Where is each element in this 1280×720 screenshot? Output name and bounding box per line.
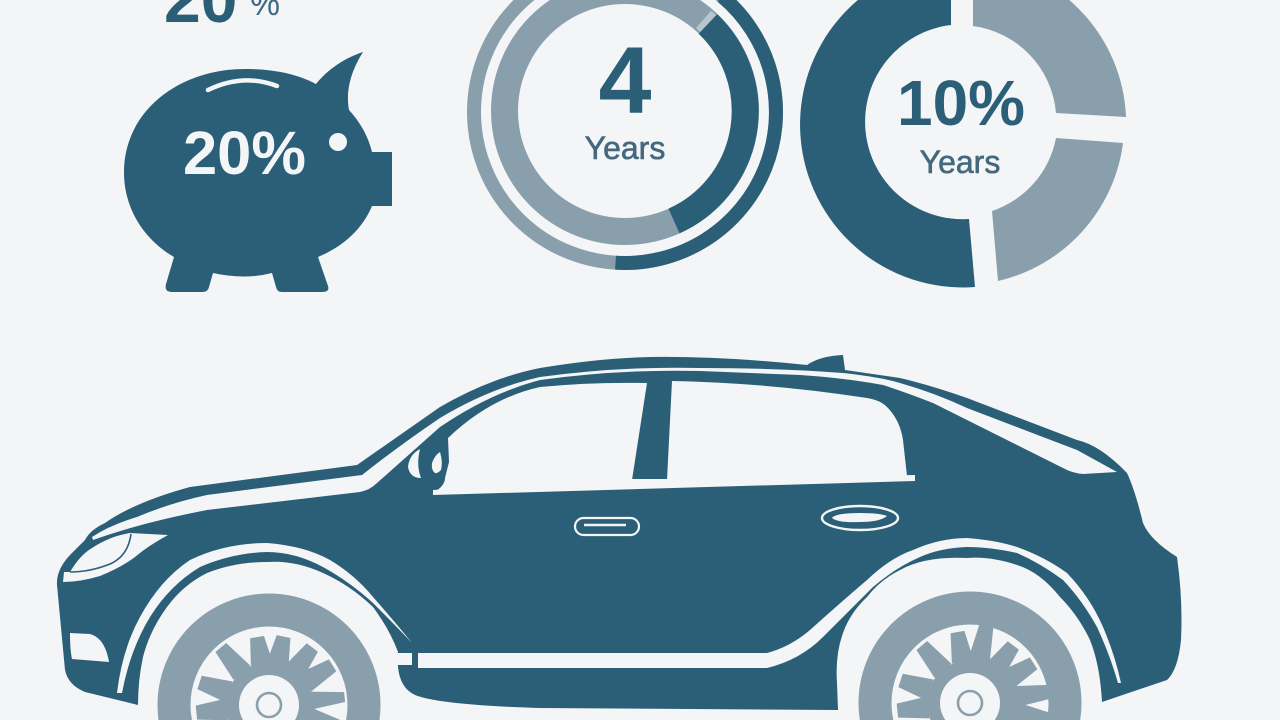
- front tyre: [174, 610, 364, 720]
- rear hub ring: [958, 691, 982, 715]
- front wheel: [174, 610, 364, 720]
- ring number: 4: [599, 28, 652, 134]
- roof and rear highlight: [700, 368, 1117, 474]
- outer ring track: [474, 0, 776, 263]
- donut grey segment lower: [992, 138, 1123, 281]
- belt line: [433, 475, 915, 495]
- mirror highlights: [408, 449, 442, 478]
- cropped heading: 20%: [164, 0, 280, 36]
- outer ring value: [616, 0, 776, 263]
- rear hub: [940, 673, 1000, 720]
- rear wheel: [875, 608, 1065, 720]
- inner ring highlight tick: [696, 11, 716, 32]
- front spokes: [195, 634, 346, 720]
- rear door handle: [822, 506, 898, 530]
- inner ring value: [674, 24, 745, 221]
- rear spokes: [896, 622, 1051, 720]
- front door handle: [575, 518, 639, 535]
- ring chart: 4 years: [474, 0, 776, 263]
- front arch highlight: [117, 543, 412, 693]
- sill end piece: [398, 653, 412, 665]
- front hub: [239, 675, 299, 720]
- headlight: [63, 533, 168, 582]
- sill and rear arch highlight: [418, 538, 1121, 683]
- ring caption: Years: [585, 130, 665, 166]
- rear tyre: [875, 608, 1065, 720]
- donut caption: Years: [920, 144, 1000, 180]
- donut dark segment: [800, 0, 975, 287]
- car body: [57, 355, 1181, 710]
- headlight line: [70, 534, 131, 572]
- icon: piggy bank: [124, 52, 392, 292]
- front hub ring: [257, 693, 281, 717]
- rear window: [667, 381, 907, 480]
- inner ring track: [504, 0, 746, 232]
- coin slot: [208, 80, 277, 90]
- donut chart: 10%: [800, 0, 1126, 287]
- donut grey segment upper: [973, 0, 1126, 117]
- donut value: 10%: [897, 67, 1025, 139]
- piggy label: 20%: [183, 119, 306, 187]
- illustration: car side view: [57, 355, 1181, 720]
- piggy body: [124, 52, 392, 292]
- front window: [436, 383, 647, 491]
- piggy eye: [329, 133, 347, 151]
- fog lamp: [70, 633, 109, 662]
- hood and windshield highlight: [92, 368, 700, 540]
